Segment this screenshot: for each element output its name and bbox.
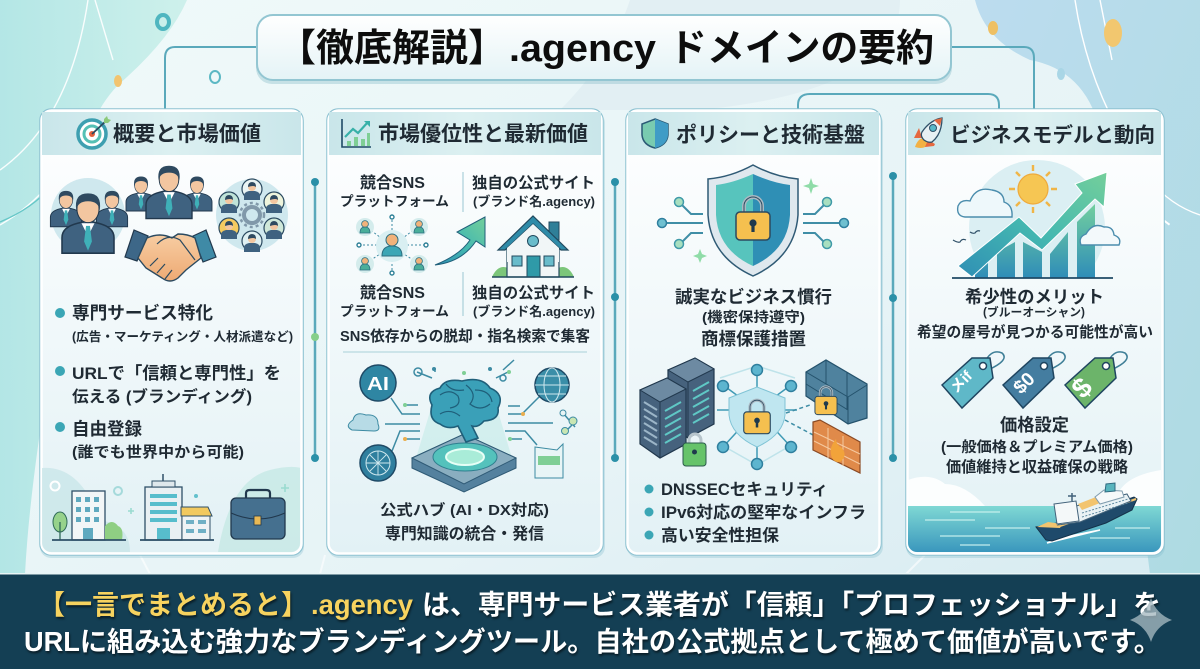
- text: pricing: 価格設定: [1000, 415, 1069, 435]
- heading: 市場優位性と最新価値: [378, 123, 588, 146]
- bullet list: (誰でも世界中から可能): [72, 443, 244, 461]
- text: business practices: 商標保護措置: [701, 329, 806, 349]
- icons: price tags: $: [1065, 371, 1099, 404]
- title: [256, 15, 952, 84]
- illustration: ship on sea: [908, 470, 1161, 552]
- title: 【徹底解説】: [278, 28, 506, 70]
- summary text: SNS依存からの脱却・指名検索で集客: [340, 327, 590, 345]
- text: SNS vs own site bottom: プラットフォーム: [340, 304, 449, 319]
- title: .agency: [509, 28, 656, 70]
- illustration: people and handshake: [50, 166, 288, 281]
- title: ドメインの要約: [669, 28, 934, 70]
- panel: ポリシーと技術基盤: [626, 109, 883, 558]
- icon: house: [492, 216, 574, 277]
- arrow: [435, 217, 485, 265]
- panel header band: [628, 112, 879, 155]
- icon: growth chart: [342, 119, 371, 147]
- panel: 市場優位性と最新価値: [327, 109, 605, 558]
- bullet list: 専門サービス特化: [72, 303, 214, 323]
- text: SNS vs own site bottom: 独自の公式サイト: [472, 284, 595, 302]
- icons: price tags: メif: [947, 367, 977, 397]
- connector lines: [165, 47, 1034, 460]
- text: pricing: 価値維持と収益確保の戦略: [946, 458, 1129, 476]
- illustration: growth chart with sun: [952, 160, 1120, 279]
- text: pricing: [941, 415, 1133, 476]
- heading: ビジネスモデルと動向: [950, 123, 1155, 147]
- bullet list: [55, 303, 293, 461]
- footer summary text: .agency: [311, 589, 414, 620]
- text: SNS vs own site top: [340, 172, 595, 212]
- panel: 概要と市場価値: [40, 109, 304, 558]
- text: official hub: 専門知識の統合・発信: [385, 524, 544, 543]
- bullet list: IPv6対応の堅牢なインフラ: [661, 503, 866, 522]
- text: SNS vs own site bottom: [340, 272, 595, 319]
- text: official hub: [380, 501, 549, 543]
- heading: 概要と市場価値: [113, 123, 261, 146]
- panel: ビジネスモデルと動向: [906, 109, 1165, 558]
- text: SNS vs own site bottom: (ブランド名.agency): [473, 304, 595, 319]
- text: SNS vs own site top: プラットフォーム: [340, 194, 449, 209]
- footer band: [0, 573, 1200, 669]
- text: scarcity: 希少性のメリット: [965, 287, 1104, 307]
- text: official hub: 公式ハブ (AI・DX対応): [380, 501, 549, 519]
- text: SNS vs own site top: 競合SNS: [360, 174, 425, 192]
- panel header band: [42, 112, 301, 155]
- bullet list: 高い安全性担保: [661, 525, 780, 545]
- footer summary text: は、専門サービス業者が「信頼」「プロフェッショナル」を: [422, 589, 1161, 620]
- text: business practices: (機密保持遵守): [702, 309, 805, 325]
- panel header band: [908, 112, 1161, 155]
- bullet list: 伝える (ブランディング): [72, 387, 252, 406]
- bullet list: DNSSECセキュリティ: [661, 481, 828, 499]
- text: scarcity: [917, 287, 1153, 341]
- text: SNS vs own site bottom: 競合SNS: [360, 284, 425, 302]
- illustration: AI brain hub: AI: [367, 374, 389, 394]
- text: SNS vs own site top: 独自の公式サイト: [472, 174, 595, 192]
- icon: sparkle: [1130, 598, 1172, 642]
- text: SNS vs own site top: (ブランド名.agency): [473, 194, 595, 209]
- text: scarcity: (ブルーオーシャン): [983, 305, 1085, 319]
- icon: rocket: [914, 118, 942, 148]
- bullet list: 自由登録: [72, 419, 142, 439]
- footer summary text: 【一言でまとめると】: [38, 589, 308, 620]
- connector dots: [311, 172, 897, 462]
- icon: target: [78, 116, 111, 148]
- text: business practices: [675, 287, 832, 349]
- icon: small shield: [642, 119, 668, 148]
- bullet list: (広告・マーケティング・人材派遣など): [72, 329, 293, 344]
- text: scarcity: 希望の屋号が見つかる可能性が高い: [917, 323, 1153, 341]
- footer summary text: [24, 589, 1161, 657]
- bullet list: [644, 481, 866, 545]
- illustration: shield and lock: [658, 165, 848, 276]
- icons: price tags: $0: [1010, 369, 1039, 399]
- icon: social network: [356, 215, 428, 275]
- text: business practices: 誠実なビジネス慣行: [675, 287, 832, 307]
- illustration: AI brain hub: [348, 360, 577, 492]
- heading: ポリシーと技術基盤: [676, 123, 865, 147]
- illustration: secure infrastructure: [640, 358, 867, 473]
- footer summary text: URLに組み込む強力なブランディングツール。自社の公式拠点として極めて価値が高いです。: [24, 626, 1161, 657]
- panel header band: [329, 112, 601, 155]
- bullet list: URLで「信頼と専門性」を: [72, 364, 281, 383]
- illustration: buildings and briefcase: [42, 467, 301, 552]
- icons: price tags: [942, 352, 1127, 408]
- text: pricing: (一般価格＆プレミアム価格): [941, 438, 1133, 456]
